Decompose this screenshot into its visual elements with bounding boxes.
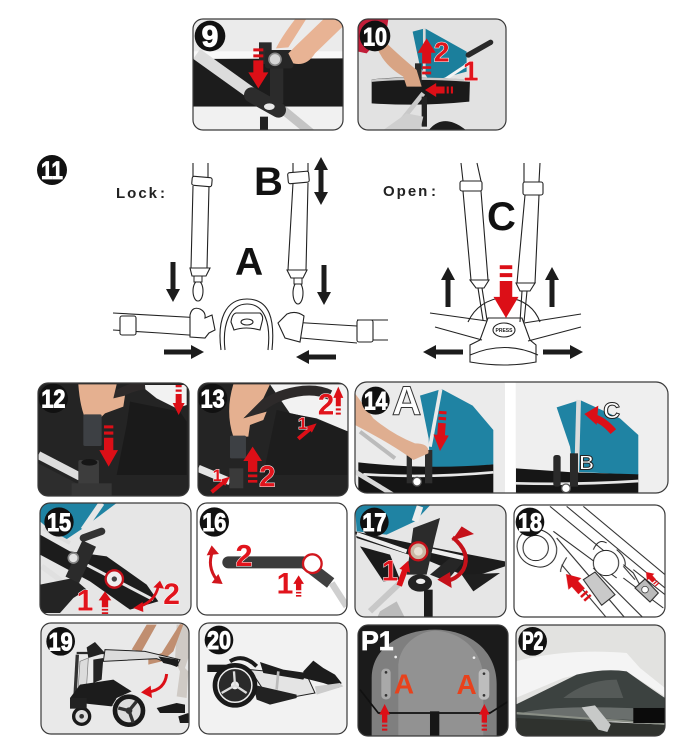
icon: hub ring: [269, 53, 281, 65]
panel: step 13: [197, 382, 350, 498]
arrow: [99, 591, 111, 614]
panel: P2: [513, 623, 668, 738]
labels: 1: [77, 585, 93, 618]
labels A: [394, 668, 477, 700]
handle: [228, 554, 347, 606]
badge: 9: 9: [202, 21, 218, 54]
badge: 18: 18: [518, 510, 542, 537]
folded stroller: [207, 658, 343, 705]
label 1: 1: [463, 56, 478, 87]
label: Lock: Lock: [116, 185, 159, 202]
arrows 1: [209, 420, 319, 495]
labels: 2: [259, 461, 275, 494]
plates: [381, 656, 489, 700]
right canopy: [557, 400, 638, 475]
label C: C: [603, 397, 620, 423]
center buckle: [220, 299, 273, 350]
curved double arrow: [207, 545, 223, 584]
center buckle with straps: PRESS: [496, 328, 513, 334]
arrow large: [560, 568, 595, 605]
arrow: [248, 48, 268, 88]
left shoulder strap: [460, 163, 489, 320]
arrow up small: [333, 387, 343, 415]
label 2: 2: [434, 37, 449, 68]
right waist strap: [278, 312, 388, 343]
label: Lock: :: [160, 185, 167, 202]
arrow small: [642, 569, 661, 588]
red circle marker: [106, 570, 123, 588]
arrow small: [173, 385, 185, 415]
labels: 1: [213, 466, 222, 485]
label A: A: [392, 377, 421, 423]
panel: step 19: [38, 621, 192, 736]
arrows: [379, 704, 490, 731]
panel: step 12: [37, 382, 193, 498]
curved arrow: [141, 674, 167, 698]
red circle marker: [409, 542, 427, 560]
labels: 2: [163, 578, 180, 611]
left waist strap: [113, 308, 215, 338]
arrow large: [99, 425, 118, 467]
badge: 13: 13: [201, 386, 225, 413]
hand: [78, 384, 125, 417]
right shoulder strap: [287, 163, 309, 304]
diagram: open harness: [383, 163, 583, 365]
panel: step 10: [357, 18, 507, 132]
labels A: A: [457, 669, 477, 700]
arrow 2: [418, 38, 436, 74]
panel: step 16: [197, 501, 350, 616]
arrow: [293, 575, 304, 597]
label P1: P1: [361, 626, 394, 656]
left shoulder strap: [190, 163, 212, 301]
zipper pull: [582, 705, 611, 732]
panel: step 20: [197, 621, 350, 736]
label: A: A: [235, 241, 263, 284]
panel: step 18: [513, 503, 667, 620]
diagram: lock harness: [113, 157, 388, 364]
labels: 2: [235, 539, 253, 573]
hand: [229, 384, 270, 437]
arm: [355, 393, 428, 460]
label B: B: [579, 452, 594, 475]
labels: [78, 582, 180, 611]
badge: 16: 16: [202, 510, 226, 537]
badge: 14: 14: [364, 388, 388, 415]
arrows: [164, 157, 336, 364]
arrows: [423, 265, 583, 359]
wheels: [70, 697, 143, 725]
badge: 15: 15: [47, 510, 71, 537]
gray clip: [583, 572, 615, 605]
label: Open: :: [431, 183, 438, 200]
badge: 20: 20: [207, 628, 231, 655]
stroller frame: [70, 642, 180, 710]
person legs and arms: [132, 624, 189, 723]
arrow up large: [243, 447, 262, 483]
labels: [235, 539, 293, 601]
right shoulder strap: [516, 163, 543, 322]
labels: [213, 393, 334, 487]
labels A: A: [394, 668, 414, 699]
center buckle with straps: [430, 297, 581, 365]
arm: [378, 44, 422, 87]
badge: 17: 17: [362, 510, 386, 537]
badge: 11: 11: [41, 157, 63, 185]
labels: 2: [318, 388, 334, 421]
panel: step 14: [353, 377, 671, 497]
arrow 1: [425, 83, 453, 97]
badge: 19: 19: [49, 629, 73, 656]
label 1: 1: [382, 556, 398, 588]
arrow: [434, 410, 449, 451]
arrow: [394, 559, 414, 588]
panel: step 17: [353, 503, 508, 620]
labels: 1: [298, 414, 307, 433]
hands: [276, 19, 343, 64]
badge: P2: P2: [522, 629, 543, 656]
badge: 12: 12: [41, 386, 65, 413]
labels: 1: [277, 568, 293, 601]
panel: P1: [357, 623, 510, 738]
tube drawing: [517, 506, 665, 618]
panel: step 9: [190, 17, 347, 133]
curved arrow: [133, 581, 164, 612]
panel: step 15: [38, 501, 193, 618]
badge: 9: [195, 21, 225, 54]
left canopy: [420, 389, 493, 471]
label: B: B: [254, 160, 283, 204]
curved arrow: [437, 526, 474, 588]
wheel: [215, 665, 255, 705]
label: C: C: [487, 195, 516, 239]
label: Open: Open: [383, 183, 429, 200]
curved arrow: [584, 406, 613, 432]
badge: 10: 10: [363, 24, 387, 51]
